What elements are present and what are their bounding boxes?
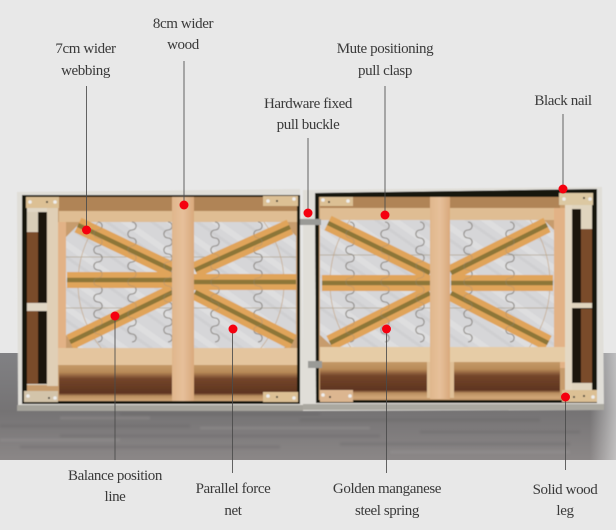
webbing straps xyxy=(67,225,296,342)
label: balance position line: line xyxy=(105,489,126,505)
spring net xyxy=(319,219,555,348)
fabric border xyxy=(303,187,604,411)
label: golden manganese steel spring: steel spring xyxy=(355,503,420,519)
upper light beam xyxy=(320,208,560,220)
lower beam xyxy=(320,347,565,362)
steel springs xyxy=(346,222,514,342)
side compartments xyxy=(27,208,66,386)
upper dark beam xyxy=(320,197,560,208)
label: 8cm wider wood: wood xyxy=(167,37,200,53)
label: solid wood leg: Solid wood xyxy=(533,482,598,498)
corner brackets xyxy=(24,196,298,402)
corner brackets xyxy=(320,193,597,402)
panel: left frame xyxy=(17,180,304,411)
label: 8cm wider wood: 8cm wider xyxy=(153,16,213,32)
label: parallel force net: Parallel force xyxy=(196,481,271,497)
lower beam xyxy=(58,348,297,365)
callout lines xyxy=(86,61,566,473)
centre beam xyxy=(172,197,194,401)
panel: right frame xyxy=(303,173,604,411)
upper light beam xyxy=(59,211,297,222)
floor xyxy=(0,353,616,460)
label: 7cm wider webbing: 7cm wider xyxy=(55,41,116,57)
black liner xyxy=(315,189,597,403)
label: golden manganese steel spring: Golden manganese xyxy=(333,481,442,497)
spring shadows over straps xyxy=(346,222,514,342)
pull buckles xyxy=(300,219,322,368)
spring net xyxy=(65,221,297,349)
label: hardware fixed pull buckle: Hardware fixed xyxy=(264,96,353,112)
lower cavity xyxy=(59,365,297,401)
upper dark beam xyxy=(59,197,297,211)
label: mute positioning pull clasp: pull clasp xyxy=(358,63,412,79)
label: balance position line: Balance position xyxy=(68,468,163,484)
label: solid wood leg: leg xyxy=(556,503,574,519)
webbing straps xyxy=(322,223,553,343)
centre beam xyxy=(430,197,450,399)
label: hardware fixed pull buckle: pull buckle xyxy=(277,117,340,133)
wood interior xyxy=(27,197,297,401)
lower cavity xyxy=(320,362,560,398)
spring shadows over straps xyxy=(94,222,262,342)
fabric border xyxy=(17,189,304,411)
label: 7cm wider webbing: webbing xyxy=(61,63,111,79)
red marker dots xyxy=(82,184,570,402)
black liner xyxy=(22,195,300,404)
steel springs xyxy=(94,222,262,342)
wood interior xyxy=(319,197,592,400)
label: parallel force net: net xyxy=(224,503,243,519)
label: mute positioning pull clasp: Mute positioning xyxy=(337,41,434,57)
side compartments xyxy=(554,205,592,395)
label: black nail: Black nail xyxy=(534,93,592,109)
sofa base photo xyxy=(17,173,604,411)
